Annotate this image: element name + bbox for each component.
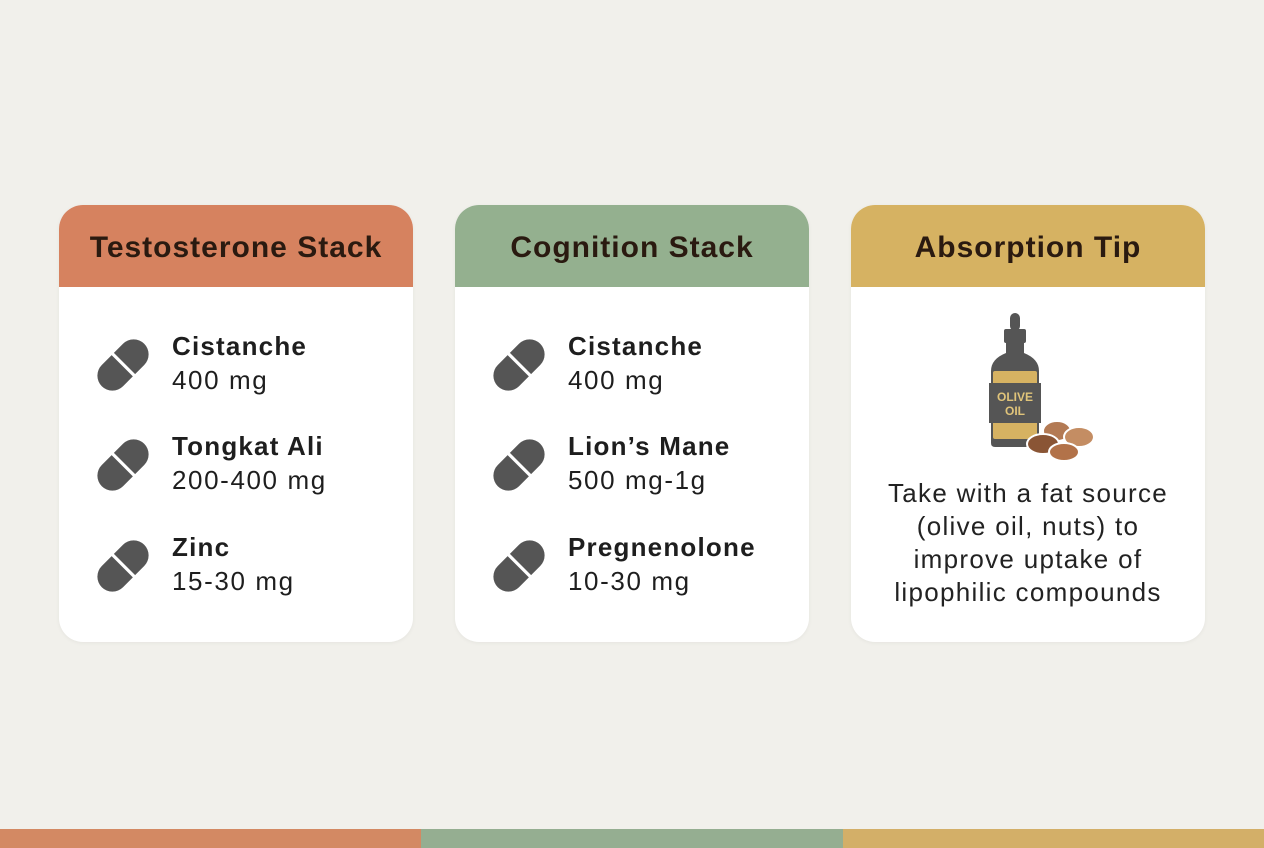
heading: absorption tip: Absorption Tip: [915, 231, 1141, 264]
item: tongkat ali: [97, 431, 327, 495]
heading: absorption tip: [851, 205, 1205, 287]
text: absorption tip: (olive oil, nuts) to: [917, 511, 1139, 541]
heading: testosterone stack: Testosterone Stack: [90, 231, 382, 264]
heading: testosterone stack: [59, 205, 413, 287]
item: pregnenolone: 10-30 mg: [568, 566, 691, 596]
item: zinc: Zinc: [172, 532, 230, 562]
icon: olive oil bottle with nuts: [989, 313, 1093, 460]
text: absorption tip: Take with a fat source: [888, 478, 1168, 508]
heading: cognition stack: [455, 205, 809, 287]
item: pregnenolone: Pregnenolone: [568, 532, 756, 562]
item: cistanche: Cistanche: [172, 331, 307, 361]
panel: cognition stack: [455, 205, 809, 642]
item: lion's mane: Lion’s Mane: [568, 431, 730, 461]
item: tongkat ali: 200-400 mg: [172, 465, 327, 495]
item: cistanche: [493, 331, 703, 395]
text: absorption tip: lipophilic compounds: [894, 577, 1162, 607]
item: zinc: 15-30 mg: [172, 566, 295, 596]
panel: testosterone stack: [59, 205, 413, 642]
item: cistanche: Cistanche: [568, 331, 703, 361]
item: cistanche: 400 mg: [172, 365, 268, 395]
item: pregnenolone: [493, 532, 756, 596]
item: lion's mane: 500 mg-1g: [568, 465, 707, 495]
item: lion's mane: [493, 431, 730, 495]
item: cistanche: [97, 331, 307, 395]
text: absorption tip: [888, 478, 1168, 607]
panel: absorption tip: [851, 205, 1205, 642]
item: cistanche: 400 mg: [568, 365, 664, 395]
item: zinc: [97, 532, 295, 596]
icon: olive oil bottle with nuts: OLIVE: [997, 390, 1033, 404]
text: absorption tip: improve uptake of: [914, 544, 1142, 574]
item: tongkat ali: Tongkat Ali: [172, 431, 324, 461]
heading: cognition stack: Cognition Stack: [510, 231, 754, 264]
bottom color bar: [0, 829, 1264, 848]
icon: olive oil bottle with nuts: OIL: [1005, 404, 1025, 418]
